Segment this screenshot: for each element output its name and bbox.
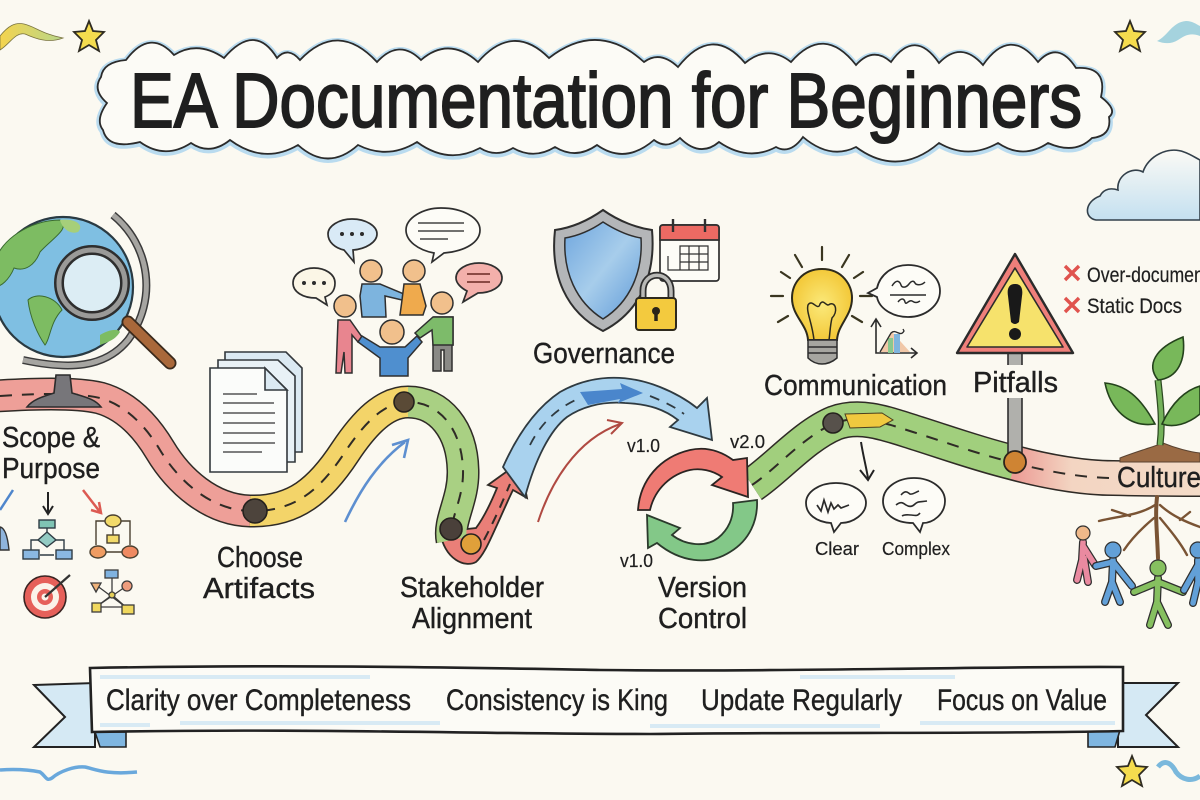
icon: padlock [636,275,676,330]
Governance label: Governance [533,338,675,370]
principles [106,684,1107,717]
principles: Focus on Value [937,684,1107,717]
icon: plant with leaves [1105,337,1200,462]
road milestones left [243,392,481,554]
icon: orange flowchart [90,515,138,558]
icon: target [24,575,70,618]
bottom-right star and swirl [1117,756,1200,786]
Choose Artifacts label: Choose [217,542,303,574]
decorative corner: top-right star and swirl [1115,21,1200,51]
version control cycle [638,449,757,560]
Stakeholder Alignment label: Stakeholder [400,572,544,604]
Stakeholder Alignment label: Alignment [412,603,532,635]
icon: people holding hands [1076,526,1200,625]
icon: green person [1134,560,1183,625]
road right [752,419,1200,485]
pitfall list [1065,264,1200,318]
ribbon body [90,666,1123,734]
icon: shield [554,210,653,331]
version labels: v2.0 [730,432,765,452]
icon: person [0,527,9,550]
road: red right [1015,463,1200,479]
Clear speech bubble [806,483,866,559]
ribbon tail left [34,683,95,747]
icon: warning sign with post [957,254,1073,473]
road: yellow section [250,402,408,511]
version labels [620,432,765,571]
icon: blue person [1096,542,1132,602]
Pitfalls label: Pitfalls [973,367,1058,399]
scope icons [0,490,138,618]
icon: pink person [1076,526,1095,582]
icon: roots [1099,497,1200,558]
principles: Update Regularly [701,684,902,717]
Version Control label: Control [658,603,747,635]
icon: people group with speech bubbles [293,208,502,376]
Communication label: Communication [764,370,947,402]
speech bubbles [293,208,502,305]
Scope & Purpose label: Scope & [2,422,100,454]
Scope & Purpose label: Purpose [2,453,100,485]
people [334,260,453,376]
bottom-left scribble [0,767,137,779]
road left [0,394,527,564]
road: centre dashes [0,394,463,540]
road markers right [823,413,893,433]
Version Control label: Version [658,572,747,604]
Clear speech bubble: Clear [815,539,859,559]
road: green right [752,419,1015,485]
blue arrow to version control [503,378,712,497]
icon: network diagram [91,570,134,614]
pitfall list: Static Docs [1087,295,1182,318]
ribbon tail right [1118,683,1178,747]
principles: Clarity over Completeness [106,684,411,717]
Complex speech bubble: Complex [882,539,950,559]
icon: light bulb [771,247,872,364]
Complex speech bubble [882,478,950,559]
title cloud banner [98,40,1112,163]
version labels: v1.0 [620,551,653,571]
icon: red cycle arrow [638,449,748,510]
icon: right blue person [1184,542,1200,603]
icon: speech bubble squiggle [868,265,940,317]
arrow down to clear complex [860,442,874,480]
Stakeholder Alignment label [400,572,544,635]
Version Control label [658,572,747,635]
icon: globe with magnifier [0,215,170,407]
cloud top right [1087,150,1200,220]
thin arrows [345,420,622,522]
Scope & Purpose label [2,422,100,485]
icon: mini chart [871,319,917,358]
decorative corner: top-left swirl and star [0,21,104,51]
Choose Artifacts label [203,542,315,605]
ribbon banner [34,666,1178,747]
road: red rising arrow [440,462,527,564]
icon: green cycle arrow [647,500,757,560]
version labels: v1.0 [627,436,660,456]
road: red start [0,394,250,511]
road: green section [408,402,463,540]
icon: blue flowchart [23,520,72,559]
principles: Consistency is King [446,684,668,717]
icon: calendar [660,219,719,281]
Choose Artifacts label: Artifacts [203,573,315,605]
icon: document stack [210,352,302,472]
